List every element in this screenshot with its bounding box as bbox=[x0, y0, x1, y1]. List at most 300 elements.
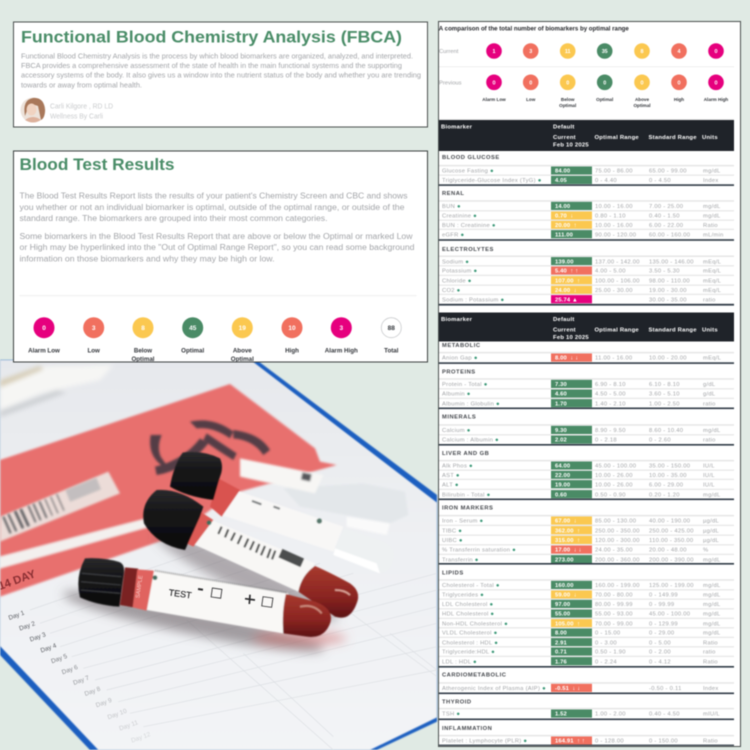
chart: current vs previous comparison: 3 bbox=[529, 49, 532, 55]
biohazard symbol bbox=[150, 420, 270, 475]
row: HDL Cholesterol: mg/dL bbox=[703, 612, 721, 618]
table header 2: Feb 10 2025 bbox=[553, 335, 589, 341]
row: Sodium bbox=[439, 255, 734, 265]
row: Triglycerides: 0 - 149.99 bbox=[649, 593, 678, 599]
row: Chloride: 98.00 - 110.00 bbox=[649, 278, 690, 284]
row: TSH: 1.52 bbox=[555, 712, 567, 718]
clear tube and white sample tube in back bbox=[240, 458, 408, 535]
row: BUN Creatinine bbox=[439, 220, 734, 229]
row: Protein Total bbox=[439, 378, 734, 388]
row: Potassium bbox=[439, 265, 734, 275]
chart: result count circles: Below bbox=[134, 348, 152, 355]
row: LDL HDL: 0 - 2.24 bbox=[595, 659, 617, 665]
middle tube bbox=[143, 490, 358, 618]
row: TSH: 0.40 - 4.50 bbox=[649, 712, 680, 718]
row: Iron Serum: 85.00 - 130.00 bbox=[595, 519, 636, 525]
row: Alk Phos: 64.00 bbox=[555, 464, 570, 470]
row: Chloride: Chloride ● bbox=[442, 278, 472, 284]
row: Cholesterol Total: 160.00 - 199.00 bbox=[595, 583, 640, 589]
section: Liver and GB bbox=[439, 451, 734, 500]
row: Anion Gap: Anion Gap ● bbox=[442, 356, 478, 362]
row: Triglycerides: mg/dL bbox=[703, 593, 721, 599]
row: LDL HDL: Ratio bbox=[703, 659, 718, 665]
row: Transferrin bbox=[439, 554, 734, 563]
row: Iron Serum: 40.00 - 190.00 bbox=[649, 519, 690, 525]
day labels: Day 9 bbox=[95, 697, 113, 709]
row: UIBC: 120.00 - 300.00 bbox=[595, 538, 640, 544]
row: Cholesterol HDL: 2.91 bbox=[555, 640, 568, 646]
row: AIP: -0.51 ↓ ↓ bbox=[555, 686, 580, 692]
row: Sodium Potassium bbox=[439, 294, 734, 303]
row: PLR: Ratio bbox=[703, 739, 718, 745]
row: Calcium Albumin: Calcium : Albumin ● bbox=[442, 438, 499, 444]
back tube bbox=[170, 452, 394, 573]
row: Non-HDL Cholesterol bbox=[439, 618, 734, 627]
row: ALT bbox=[439, 479, 734, 488]
chart: result count circles: Alarm Low bbox=[28, 348, 60, 355]
row: Non-HDL Cholesterol: 70.00 - 99.00 bbox=[595, 621, 633, 627]
row: ALT: ALT ● bbox=[442, 482, 459, 488]
row: Albumin: g/dL bbox=[703, 392, 716, 398]
row: ALT: 10.00 - 26.00 bbox=[595, 482, 633, 488]
row: BUN: 10.00 - 16.00 bbox=[595, 204, 633, 210]
row: Cholesterol Total bbox=[439, 579, 734, 589]
section: Blood Glucose: BLOOD GLUCOSE bbox=[442, 155, 500, 161]
row: CO2: CO2 ● bbox=[442, 288, 461, 294]
row: Protein Total: 6.10 - 8.10 bbox=[649, 382, 680, 388]
row: Non-HDL Cholesterol: mg/dL bbox=[703, 621, 721, 627]
chart: current vs previous comparison: High bbox=[674, 97, 684, 102]
row: Sodium Potassium: 25.74 ▲ bbox=[555, 297, 578, 303]
section: Iron Markers: IRON MARKERS bbox=[442, 505, 493, 511]
panel: biomarker report bbox=[438, 22, 740, 746]
day labels: Day 4 bbox=[40, 642, 58, 655]
row: CO2 bbox=[439, 284, 734, 294]
clipboard paper bbox=[0, 360, 437, 750]
chart: result count circles: 45 bbox=[189, 325, 197, 332]
chart: current vs previous comparison: Previous bbox=[439, 80, 462, 86]
row: Albumin Globulin: 1.70 bbox=[555, 401, 567, 407]
row: TyG Index bbox=[439, 174, 734, 184]
table header 1: Feb 10 2025 bbox=[553, 143, 589, 149]
row: CO2: 25.00 - 30.00 bbox=[595, 288, 633, 294]
row: HDL Cholesterol: 55.00 - 93.00 bbox=[595, 612, 633, 618]
row: Cholesterol HDL: Cholesterol : HDL ● bbox=[442, 640, 498, 646]
row: Triglycerides: 70.00 - 80.00 bbox=[595, 593, 633, 599]
row: Potassium: 3.50 - 5.30 bbox=[649, 269, 680, 275]
chart: result count circles: Optimal bbox=[231, 356, 254, 363]
table header 2 bbox=[439, 312, 734, 342]
chart: result count circles: Low bbox=[88, 348, 100, 355]
row: AIP bbox=[439, 682, 734, 692]
table header 1: Biomarker bbox=[441, 125, 473, 131]
row: Sodium: Sodium ● bbox=[442, 259, 469, 265]
chart: current vs previous comparison: 1 bbox=[492, 49, 496, 55]
row: eGFR bbox=[439, 229, 734, 238]
day labels: Day 3 bbox=[29, 631, 47, 644]
row: BUN Creatinine: 20.00 ↑ bbox=[555, 223, 577, 229]
chart: current vs previous comparison: 8 bbox=[640, 49, 644, 55]
row: Anion Gap: 8.00 ↓ ↓ bbox=[555, 356, 578, 362]
row: Non-HDL Cholesterol: 0 - 129.99 bbox=[649, 621, 678, 627]
row: Bilirubin Total: Bilirubin - Total ● bbox=[442, 492, 491, 498]
row: eGFR: 60.00 - 160.00 bbox=[649, 232, 690, 238]
section: Minerals bbox=[439, 415, 734, 446]
row: AIP: Atherogenic Index of Plasma (AIP) ● bbox=[442, 686, 546, 692]
row: BUN bbox=[439, 200, 734, 210]
row: Transferrin saturation: 24.00 - 35.00 bbox=[595, 548, 633, 554]
row: AIP: Index bbox=[703, 686, 719, 692]
row: UIBC bbox=[439, 534, 734, 544]
chart: result count circles: Above bbox=[233, 348, 252, 355]
section: Cardiometabolic bbox=[439, 673, 734, 694]
section: Electrolytes bbox=[439, 247, 734, 306]
row: VLDL Cholesterol: VLDL Cholesterol ● bbox=[442, 631, 498, 637]
row: Calcium: mg/dL bbox=[703, 428, 721, 434]
row: eGFR: mL/min bbox=[703, 232, 724, 238]
row: Glucose Fasting: 75.00 - 86.00 bbox=[595, 169, 633, 175]
chart: current vs previous comparison: Optimal bbox=[559, 103, 576, 108]
row: Albumin: 4.50 - 5.00 bbox=[595, 392, 626, 398]
row: ALT: IU/L bbox=[703, 482, 715, 488]
row: TIBC: µg/dL bbox=[703, 528, 720, 534]
panel: Blood Test Results bbox=[14, 151, 428, 363]
row: HDL Cholesterol bbox=[439, 608, 734, 618]
row: Albumin: 4.60 bbox=[555, 392, 567, 398]
chart: current vs previous comparison: 4 bbox=[678, 49, 680, 55]
chart: result count circles: 10 bbox=[288, 325, 296, 332]
text block: report explanation: or High may be hyperlinked into the "Out of Optimal Range Report", so you can read some background bbox=[20, 243, 415, 252]
row: AIP: -0.50 - 0.11 bbox=[649, 686, 682, 692]
row: Creatinine: 0.80 - 1.10 bbox=[595, 214, 626, 220]
row: AST: 22.00 bbox=[555, 473, 570, 479]
chart: current vs previous comparison: 0 bbox=[640, 80, 644, 86]
chart: result count circles: Optimal bbox=[131, 356, 155, 363]
photo: blood sample tubes on clipboard bbox=[0, 360, 437, 750]
row: TIBC: 250.00 - 425.00 bbox=[649, 528, 694, 534]
row: VLDL Cholesterol: 0 - 29.00 bbox=[649, 631, 674, 637]
row: Potassium: Potassium ● bbox=[442, 269, 477, 275]
row: VLDL Cholesterol: mg/dL bbox=[703, 631, 721, 637]
row: Chloride: 107.00 ↑ bbox=[555, 278, 580, 284]
row: PLR: 164.91 ↑ ↑ bbox=[555, 739, 585, 745]
chart: current vs previous comparison: 0 bbox=[714, 80, 718, 86]
chart: current vs previous comparison: 0 bbox=[529, 80, 532, 86]
row: TIBC: 250.00 - 350.00 bbox=[595, 528, 640, 534]
row: LDL HDL: 1.76 bbox=[555, 659, 568, 665]
row: Calcium Albumin bbox=[439, 434, 734, 444]
section: Metabolic bbox=[439, 343, 734, 364]
row: Calcium: Calcium ● bbox=[442, 428, 471, 434]
row: LDL HDL: 0 - 4.12 bbox=[649, 659, 671, 665]
row: UIBC: 315.00 ↑ bbox=[555, 538, 580, 544]
text block: report explanation: Some biomarkers in the Blood Test Results Report that are above or below the Optimal or marked Low bbox=[20, 232, 413, 241]
row: Triglyceride HDL: Triglyceride:HDL ● bbox=[442, 650, 495, 656]
chart: current vs previous comparison: Alarm High bbox=[704, 97, 728, 102]
row: Alk Phos: IU/L bbox=[703, 464, 715, 470]
row: Bilirubin Total bbox=[439, 489, 734, 498]
row: Chloride: 100.00 - 106.00 bbox=[595, 278, 640, 284]
row: TSH: mIU/L bbox=[703, 712, 720, 718]
chart: current vs previous comparison: 0 bbox=[714, 49, 718, 55]
row: BUN Creatinine: Ratio bbox=[703, 223, 718, 229]
row: Triglycerides bbox=[439, 589, 734, 599]
row: Triglyceride HDL: 0.71 bbox=[555, 650, 568, 656]
chart: current vs previous comparison: Current bbox=[439, 49, 459, 55]
row: Calcium: 8.60 - 10.40 bbox=[649, 428, 683, 434]
table header 2: Units bbox=[702, 328, 718, 334]
heading: Blood Test Results: Blood Test Results bbox=[20, 156, 175, 174]
row: Transferrin saturation: 17.00 ↓ ↓ bbox=[555, 548, 582, 554]
row: Protein Total: g/dL bbox=[703, 382, 716, 388]
chart: current vs previous comparison bbox=[439, 43, 734, 120]
row: BUN: BUN ● bbox=[442, 204, 461, 210]
section: Blood Glucose bbox=[439, 155, 734, 186]
row: Protein Total: 6.90 - 8.10 bbox=[595, 382, 626, 388]
row: CO2: 19.00 - 30.00 bbox=[649, 288, 687, 294]
day labels: Day 11 bbox=[118, 719, 140, 733]
row: Glucose Fasting bbox=[439, 165, 734, 175]
row: Non-HDL Cholesterol: Non-HDL Cholesterol ● bbox=[442, 621, 508, 627]
row: Anion Gap: 11.00 - 16.00 bbox=[595, 356, 632, 362]
row: Alk Phos: Alk Phos ● bbox=[442, 464, 473, 470]
row: Creatinine: mg/dL bbox=[703, 214, 721, 220]
row: Anion Gap: mEq/L bbox=[703, 356, 722, 362]
chart: current vs previous comparison: 0 bbox=[678, 80, 680, 86]
row: Glucose Fasting: 84.00 bbox=[555, 169, 570, 175]
row: HDL Cholesterol: 55.00 bbox=[555, 612, 570, 618]
row: Transferrin: 200.00 - 390.00 bbox=[649, 557, 694, 563]
row: Sodium: 139.00 bbox=[555, 259, 574, 265]
row: Albumin: 3.60 - 5.10 bbox=[649, 392, 680, 398]
row: Calcium Albumin: 0 - 2.18 bbox=[595, 438, 617, 444]
chart: current vs previous comparison: Alarm Low bbox=[482, 97, 506, 102]
row: Calcium: 9.30 bbox=[555, 428, 567, 434]
front tube bbox=[78, 558, 331, 637]
chart: current vs previous comparison: Below bbox=[561, 97, 575, 102]
row: Iron Serum: Iron - Serum ● bbox=[442, 519, 483, 525]
section: Electrolytes: ELECTROLYTES bbox=[442, 247, 494, 253]
chart: result count circles: 0 bbox=[42, 325, 46, 332]
row: Potassium: 5.40 ↑ ↑ bbox=[555, 269, 578, 275]
row: Transferrin: 273.00 bbox=[555, 557, 574, 563]
row: AST: IU/L bbox=[703, 473, 715, 479]
chart: result count circles: Alarm High bbox=[325, 348, 358, 355]
table header 2: Current bbox=[553, 328, 576, 334]
row: HDL Cholesterol: 45.00 - 100.00 bbox=[649, 612, 690, 618]
row: VLDL Cholesterol: 8.00 bbox=[555, 631, 567, 637]
row: LDL Cholesterol: LDL Cholesterol ● bbox=[442, 602, 493, 608]
row: Albumin: Albumin ● bbox=[442, 392, 471, 398]
row: Transferrin saturation: 20.00 - 48.00 bbox=[649, 548, 687, 554]
row: Bilirubin Total: 0.20 - 1.20 bbox=[649, 492, 680, 498]
row: Alk Phos bbox=[439, 460, 734, 470]
tube shadows bbox=[60, 536, 349, 658]
row: Albumin Globulin: 1.40 - 2.10 bbox=[595, 401, 626, 407]
row: ALT: 19.00 bbox=[555, 482, 570, 488]
row: Potassium: mEq/L bbox=[703, 269, 722, 275]
day labels: Day 2 bbox=[18, 620, 37, 633]
chart grid bbox=[31, 584, 436, 749]
heading: comparison: A comparison of the total number of biomarkers by optimal range bbox=[439, 25, 629, 32]
chart: result count circles: High bbox=[285, 348, 299, 355]
row: Creatinine: Creatinine ● bbox=[442, 214, 477, 220]
row: AST bbox=[439, 470, 734, 479]
row: LDL HDL bbox=[439, 656, 734, 665]
row: CO2: mEq/L bbox=[703, 288, 722, 294]
row: Bilirubin Total: 0.60 bbox=[555, 492, 567, 498]
row: BUN Creatinine: 6.00 - 22.00 bbox=[649, 223, 683, 229]
row: AST: 10.00 - 35.00 bbox=[649, 473, 687, 479]
tube label text: TEST bbox=[168, 587, 193, 601]
text block: author: Carli Kilgore , RD LD bbox=[50, 102, 114, 111]
panel: FBCA intro bbox=[14, 22, 428, 127]
row: Triglyceride HDL: 0.50 - 1.90 bbox=[595, 650, 626, 656]
chart: result count circles bbox=[28, 317, 401, 363]
row: Cholesterol HDL: 0 - 3.00 bbox=[595, 640, 617, 646]
section: Thyroid bbox=[439, 699, 734, 720]
table header 1: Current bbox=[553, 135, 576, 141]
table header 1: Standard Range bbox=[648, 135, 697, 141]
row: BUN: 7.00 - 25.00 bbox=[649, 204, 683, 210]
row: Non-HDL Cholesterol: 105.00 ↑ bbox=[555, 621, 580, 627]
row: eGFR: 111.00 bbox=[555, 232, 573, 238]
row: ALT: 6.00 - 29.00 bbox=[649, 482, 683, 488]
day labels: Day 12 bbox=[130, 731, 152, 745]
row: AST: AST ● bbox=[442, 473, 460, 479]
row: Transferrin saturation bbox=[439, 544, 734, 554]
section: Inflammation: INFLAMMATION bbox=[442, 726, 492, 732]
row: Potassium: 4.00 - 5.00 bbox=[595, 269, 626, 275]
chart: current vs previous comparison: Optimal bbox=[633, 103, 651, 108]
day labels: Day 7 bbox=[72, 674, 91, 687]
row: BUN: mg/dL bbox=[703, 204, 721, 210]
day labels: Day 1 bbox=[8, 609, 26, 622]
row: PLR: Platelet : Lymphocyte (PLR) ● bbox=[442, 739, 527, 745]
text block: report explanation bbox=[20, 192, 415, 264]
row: Transferrin: mg/dL bbox=[703, 557, 721, 563]
chart: result count circles: 3 bbox=[339, 325, 343, 332]
row: Chloride bbox=[439, 275, 734, 284]
row: AST: 10.00 - 26.00 bbox=[595, 473, 633, 479]
text block: FBCA description bbox=[21, 54, 421, 90]
chart: result count circles: 19 bbox=[239, 325, 246, 332]
text block: report explanation: standard range. The biomarkers are grouped into their most common categories. bbox=[20, 214, 327, 223]
chart: result count circles: 8 bbox=[141, 325, 145, 332]
row: Sodium Potassium: ratio bbox=[703, 297, 716, 303]
chart: current vs previous comparison: Above bbox=[635, 97, 649, 102]
text block: report explanation: The Blood Test Results Report lists the results of your patient's Chemistry Screen and CBC and shows bbox=[20, 192, 408, 200]
tube label text: SAMPLE bbox=[135, 575, 145, 599]
chart: result count circles: Total bbox=[384, 348, 399, 355]
tube label text bbox=[135, 575, 273, 607]
row: TIBC: TIBC ● bbox=[442, 528, 462, 534]
row: Bilirubin Total: mg/dL bbox=[703, 492, 721, 498]
row: Anion Gap: 10.00 - 20.00 bbox=[649, 356, 687, 362]
row: Alk Phos: 35.00 - 150.00 bbox=[649, 464, 690, 470]
section: Liver and GB: LIVER AND GB bbox=[442, 451, 489, 457]
row: PLR: 0 - 150.00 bbox=[649, 739, 678, 745]
table header 1: Units bbox=[702, 135, 718, 141]
row: VLDL Cholesterol: 0 - 15.00 bbox=[595, 631, 620, 637]
row: Iron Serum: µg/dL bbox=[703, 519, 720, 525]
section: Cardiometabolic: CARDIOMETABOLIC bbox=[442, 673, 507, 679]
barcode label bbox=[0, 472, 120, 542]
row: Sodium Potassium: Sodium : Potassium ● bbox=[442, 297, 504, 303]
row: eGFR: 90.00 - 120.00 bbox=[595, 232, 636, 238]
clipboard metal clip bbox=[0, 365, 113, 417]
table header 2: Default bbox=[553, 317, 575, 323]
section: Minerals: MINERALS bbox=[442, 415, 476, 421]
row: Cholesterol HDL: 0 - 5.00 bbox=[649, 640, 671, 646]
section: Lipids bbox=[439, 570, 734, 668]
row: UIBC: 110.00 - 350.00 bbox=[649, 538, 693, 544]
row: Sodium Potassium: 30.00 - 35.00 bbox=[649, 297, 687, 303]
row: CO2: 24.00 ↓ bbox=[555, 288, 577, 294]
row: Protein Total: 7.30 bbox=[555, 382, 567, 388]
table header 2: Standard Range bbox=[648, 328, 697, 334]
icon: author avatar bbox=[20, 98, 46, 122]
chart: current vs previous comparison: 11 bbox=[565, 49, 571, 55]
heading: FBCA title: Functional Blood Chemistry Analysis (FBCA) bbox=[21, 27, 402, 46]
row: eGFR: eGFR ● bbox=[442, 232, 464, 238]
table header 2: Optimal Range bbox=[594, 328, 639, 334]
row: TyG Index: Index bbox=[703, 178, 719, 184]
row: Transferrin saturation: % bbox=[703, 548, 708, 554]
row: PLR bbox=[439, 735, 734, 745]
row: Bilirubin Total: 0.50 - 0.90 bbox=[595, 492, 626, 498]
text block: author bbox=[50, 102, 114, 120]
section: Proteins: PROTEINS bbox=[442, 370, 476, 376]
table header 2: Biomarker bbox=[441, 317, 473, 323]
row: Calcium Albumin: 0 - 2.60 bbox=[649, 438, 671, 444]
row: Cholesterol HDL bbox=[439, 637, 734, 646]
section: Renal bbox=[439, 191, 734, 241]
row: LDL HDL: LDL : HDL ● bbox=[442, 659, 477, 665]
row: Transferrin: Transferrin ● bbox=[442, 557, 479, 563]
row: TyG Index: 4.05 bbox=[555, 178, 568, 184]
row: Albumin bbox=[439, 388, 734, 398]
row: LDL Cholesterol: 80.00 - 99.99 bbox=[595, 602, 633, 608]
row: Alk Phos: 45.00 - 100.00 bbox=[595, 464, 636, 470]
chart: current vs previous comparison: 35 bbox=[602, 49, 608, 55]
row: Chloride: mEq/L bbox=[703, 278, 722, 284]
chart: result count circles: Optimal bbox=[181, 348, 204, 355]
day labels: Day 10 bbox=[107, 708, 128, 721]
section: Renal: RENAL bbox=[442, 191, 464, 197]
text block: report explanation: you whether or not an individual biomarker is optimal, outside of the optimal range, or outside of the bbox=[20, 203, 405, 212]
day labels bbox=[8, 609, 152, 745]
row: TSH bbox=[439, 708, 734, 718]
row: Cholesterol Total: 160.00 bbox=[555, 583, 574, 589]
row: Cholesterol Total: mg/dL bbox=[703, 583, 721, 589]
row: Creatinine bbox=[439, 210, 734, 220]
table header 1: Default bbox=[553, 125, 575, 131]
text block: FBCA description: towards or away from optimal health. bbox=[21, 82, 142, 90]
row: VLDL Cholesterol bbox=[439, 627, 734, 637]
row: Anion Gap bbox=[439, 352, 734, 362]
section: Proteins bbox=[439, 370, 734, 409]
row: LDL Cholesterol: 97.00 bbox=[555, 602, 570, 608]
row: Glucose Fasting: 65.00 - 99.00 bbox=[649, 169, 687, 175]
day labels: Day 8 bbox=[84, 685, 102, 698]
row: Glucose Fasting: mg/dL bbox=[703, 169, 721, 175]
row: TIBC: 362.00 ↑ bbox=[555, 528, 580, 534]
row: Creatinine: 0.70 ↓ bbox=[555, 214, 573, 220]
row: Iron Serum: 67.00 ↓ bbox=[555, 519, 577, 525]
row: BUN: 14.00 bbox=[555, 204, 570, 210]
row: UIBC: UIBC ● bbox=[442, 538, 463, 544]
